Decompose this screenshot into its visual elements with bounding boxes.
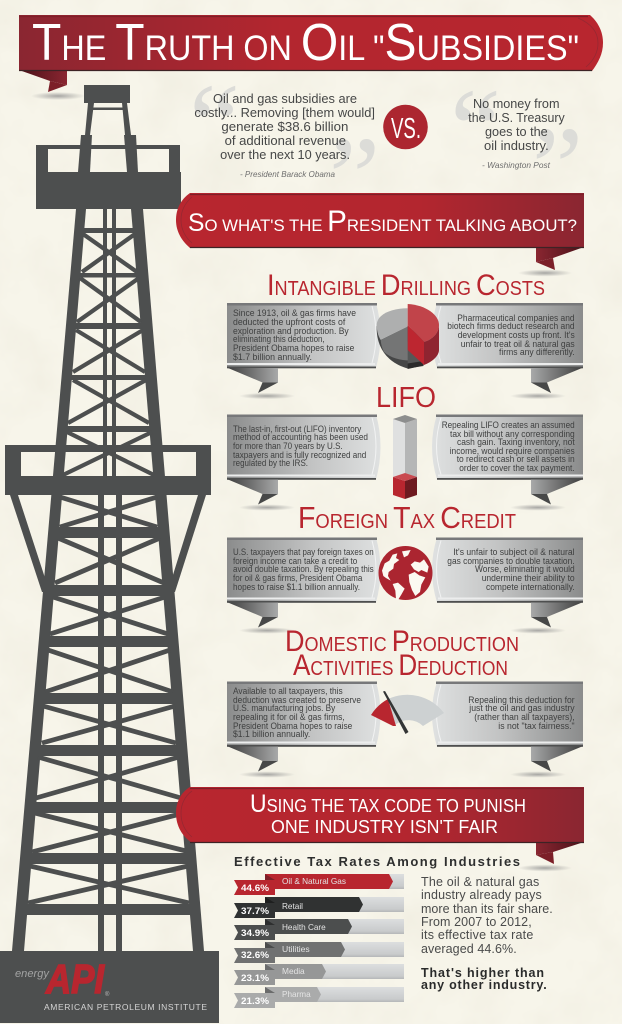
left panel text: taxpayers and is fully recognized and <box>233 450 366 460</box>
closing text <box>250 790 526 837</box>
chart commentary: From 2007 to 2012, <box>421 915 532 929</box>
API wordmark: API <box>45 956 105 1002</box>
right panel text: development costs up front. It's <box>458 330 575 340</box>
bar chart: effective tax rates <box>234 874 404 1008</box>
right panel text: compete internationally. <box>486 582 575 592</box>
left panel text: for oil & gas firms, President Obama <box>233 573 362 583</box>
VS badge: VS. <box>391 113 421 145</box>
right panel text: Worse, eliminating it would <box>475 564 575 574</box>
left panel text: deducted the upfront costs of <box>233 317 346 327</box>
left panel text: Since 1913, oil & gas firms have <box>233 308 356 318</box>
left panel text: hopes to raise $1.1 billion annually. <box>233 582 360 592</box>
bar: Health Care 34.9%: Health Care <box>282 922 326 932</box>
icon: inventory column <box>393 415 417 499</box>
left panel text: exploration and production. By <box>233 326 349 336</box>
bar: Utilities 32.6%: Utilities <box>282 944 310 954</box>
right panel text <box>447 313 575 357</box>
quote lines: the U.S. Treasury <box>468 111 565 125</box>
right panel text: It's unfair to subject oil & natural <box>453 547 575 557</box>
left panel text <box>233 686 361 739</box>
quote lines: goes to the <box>485 125 548 139</box>
right panel text: order to cover the tax payment. <box>459 463 575 473</box>
chart commentary: industry already pays <box>421 888 542 902</box>
bar: Health Care 34.9%: 34.9% <box>241 928 270 939</box>
section: Domestic Production Activities Deduction <box>227 625 583 778</box>
bar: Retail 37.7% <box>234 897 404 918</box>
bar: Media 23.1%: 23.1% <box>241 973 270 984</box>
chart commentary: The oil & natural gas <box>421 875 539 889</box>
closing quotation mark: ” <box>532 104 583 231</box>
left panel text <box>233 547 374 592</box>
right panel text: undermine their ability to <box>482 573 575 583</box>
left panel text: $1.7 billion annually. <box>233 352 312 362</box>
chart heading: Effective Tax Rates Among Industries <box>234 854 520 869</box>
bar: Oil & Natural Gas 44.6%: 44.6% <box>241 883 270 894</box>
right panel text <box>442 420 575 473</box>
heading: LIFO <box>376 382 436 414</box>
heading: FOREIGN TAX CREDIT <box>298 500 516 535</box>
heading: ACTIVITIES DEDUCTION <box>293 649 508 682</box>
right panel text: biotech firms deduct research and <box>447 321 575 331</box>
bar: Retail 37.7%: 37.7% <box>241 906 270 917</box>
left panel text: repealing it for oil & gas firms, <box>233 712 345 722</box>
opening quotation mark: “ <box>189 61 240 188</box>
left panel text: avoid double taxation. By repealing this <box>233 564 374 574</box>
left panel text: eliminating this deduction, <box>233 334 325 344</box>
quote lines: Oil and gas subsidies are <box>213 92 357 106</box>
right panel text: Repealing this deduction for <box>468 695 575 705</box>
left panel text: deduction was created to preserve <box>233 695 361 705</box>
opening quotation mark: “ <box>450 66 501 193</box>
bar: Media 23.1%: Media <box>282 966 305 976</box>
quote lines <box>468 97 565 153</box>
bold conclusion: any other industry. <box>421 978 547 992</box>
left panel <box>227 682 380 778</box>
right panel text: tax bill without any corresponding <box>450 429 575 439</box>
bar: Pharma 21.3%: 21.3% <box>241 996 270 1007</box>
attribution: - Washington Post <box>482 160 551 170</box>
section: Foreign Tax Credit <box>227 500 583 634</box>
right panel text: cash gain. Taxing inventory, not <box>457 437 575 447</box>
right panel text <box>468 695 575 731</box>
left panel <box>227 414 380 511</box>
quote: Washington Post <box>450 66 583 231</box>
right panel text: just the oil and gas industry <box>468 703 575 713</box>
left panel text: regulated by the IRS. <box>233 458 308 468</box>
icon: globe <box>378 546 432 600</box>
heading: INTANGIBLE DRILLING COSTS <box>267 269 545 302</box>
left panel text: The last-in, first-out (LIFO) inventory <box>233 424 362 434</box>
chart commentary: averaged 44.6%. <box>421 942 517 956</box>
energy wordmark: energy <box>15 968 51 980</box>
section: Intangible Drilling Costs <box>227 269 583 399</box>
left panel text: President Obama hopes to raise <box>233 721 352 731</box>
bar: Oil & Natural Gas 44.6%: Oil & Natural Gas <box>282 876 346 886</box>
right panel <box>432 303 583 399</box>
right panel text: income, would require companies <box>450 446 575 456</box>
left panel text <box>233 308 356 362</box>
right panel <box>432 414 583 511</box>
bold conclusion: That's higher than <box>421 966 544 980</box>
section: LIFO <box>227 382 583 511</box>
left panel <box>227 538 380 634</box>
left panel text: U.S. taxpayers that pay foreign taxes on <box>233 547 374 557</box>
bar: Utilities 32.6% <box>234 942 404 963</box>
quote lines: over the next 10 years. <box>220 148 350 162</box>
bar: Retail 37.7%: Retail <box>282 901 303 911</box>
bar: Media 23.1% <box>234 964 404 985</box>
right panel text: to redirect cash or sell assets in <box>457 454 575 464</box>
right panel text: Repealing LIFO creates an assumed <box>442 420 575 430</box>
left panel text: foreign income can take a credit to <box>233 556 357 566</box>
chart commentary: its effective tax rate <box>421 928 533 942</box>
chart commentary <box>421 875 553 992</box>
right panel text: is not "tax fairness." <box>498 721 575 731</box>
question banner <box>176 193 584 276</box>
bar: Health Care 34.9% <box>234 919 404 940</box>
left panel text: for more than 70 years by U.S. <box>233 441 343 451</box>
right panel text: gas companies to double taxation. <box>447 556 575 566</box>
icon: gauge <box>371 691 444 734</box>
bar: Pharma 21.3%: Pharma <box>282 989 311 999</box>
left panel <box>227 303 380 399</box>
icon: 3D pie chart <box>377 304 439 369</box>
left panel text: Available to all taxpayers, this <box>233 686 343 696</box>
chart commentary: more than its fair share. <box>421 902 553 916</box>
quote lines: generate $38.6 billion <box>221 120 348 134</box>
right panel <box>432 682 583 778</box>
question text: SO WHAT'S THE PRESIDENT TALKING ABOUT? <box>188 205 577 238</box>
attribution: - President Barack Obama <box>240 169 335 179</box>
heading: DOMESTIC PRODUCTION <box>285 625 519 658</box>
bar: Pharma 21.3% <box>234 987 404 1008</box>
right panel text: (rather than all taxpayers), <box>474 712 575 722</box>
quote lines: oil industry. <box>484 139 549 153</box>
bold conclusion <box>421 966 547 992</box>
logo block: American Petroleum Institute <box>0 951 219 1023</box>
quote lines: costly... Removing [them would] <box>194 106 375 120</box>
left panel text: President Obama hopes to raise <box>233 343 354 353</box>
right panel text <box>447 547 575 592</box>
quote lines: of additional revenue <box>225 134 346 148</box>
left panel text: $1.1 billion annually. <box>233 729 310 739</box>
oil derrick tower <box>5 85 211 951</box>
closing quotation mark: ” <box>329 114 380 241</box>
quote lines: No money from <box>473 97 560 111</box>
quote: President Obama <box>189 61 380 241</box>
VS badge <box>383 105 428 149</box>
closing text: ONE INDUSTRY ISN'T FAIR <box>271 817 498 837</box>
right panel text: firms any differently. <box>499 347 575 357</box>
left panel text: U.S. manufacturing jobs. By <box>233 703 336 713</box>
bar: Oil & Natural Gas 44.6% <box>234 874 404 895</box>
left panel text <box>233 424 368 468</box>
registered mark: ® <box>105 991 110 998</box>
right panel text: Pharmaceutical companies and <box>457 313 575 323</box>
bar: Utilities 32.6%: 32.6% <box>241 950 270 961</box>
closing banner <box>176 787 584 872</box>
title banner <box>19 14 603 100</box>
heading <box>285 625 519 682</box>
right panel text: unfair to treat oil & natural gas <box>461 339 575 349</box>
right panel <box>432 538 583 634</box>
title text: THE TRUTH ON OIL "SUBSIDIES" <box>32 14 579 72</box>
left panel text: method of accounting has been used <box>233 432 368 442</box>
organisation name: AMERICAN PETROLEUM INSTITUTE <box>44 1002 207 1012</box>
quote lines <box>194 92 375 162</box>
closing text: USING THE TAX CODE TO PUNISH <box>250 790 526 818</box>
